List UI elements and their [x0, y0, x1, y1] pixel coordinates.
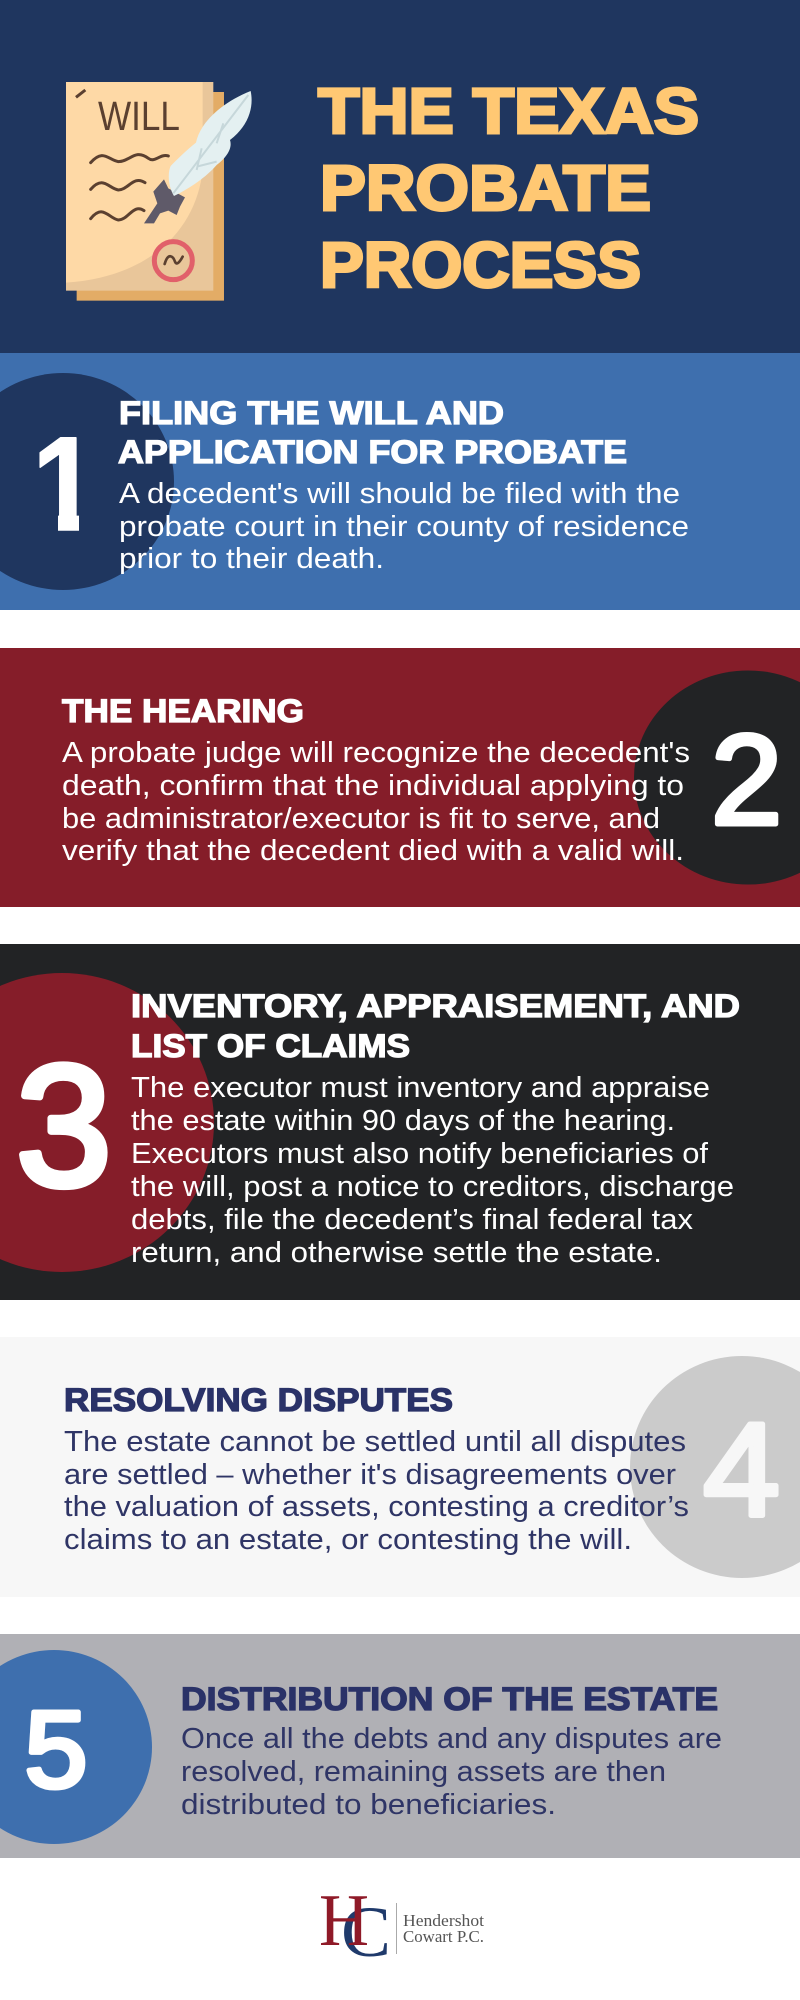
- panel: header: [0, 0, 800, 353]
- text: step 3 body: The executor must inventory and appraise: [131, 1072, 710, 1104]
- title: PROBATE: [320, 152, 651, 224]
- text: step 4 body: claims to an estate, or contesting the will.: [64, 1524, 632, 1556]
- logo: Hendershot Cowart P.C.: Cowart P.C.: [403, 1927, 484, 1946]
- number badge 4: 4: [703, 1396, 780, 1544]
- number badge 1: [0, 373, 174, 590]
- text: step 2 body: verify that the decedent died with a valid will.: [62, 835, 684, 867]
- heading: step 4: RESOLVING DISPUTES: [64, 1382, 453, 1418]
- text: step 5 body: [181, 1723, 722, 1821]
- text: step 1 body: [119, 478, 689, 575]
- text: step 2 body: A probate judge will recognize the decedent's: [62, 737, 690, 769]
- icon: will document with quill: WILL: [98, 93, 180, 139]
- panel: step 2 the hearing: [0, 648, 800, 907]
- text: step 2 body: be administrator/executor is fit to serve, and: [62, 803, 660, 835]
- title: THE TEXAS: [318, 75, 699, 147]
- heading: step 1: FILING THE WILL AND: [119, 395, 504, 431]
- text: step 2 body: [62, 737, 690, 867]
- panel: step 1 filing the will: [0, 353, 800, 610]
- heading: step 1: [118, 395, 627, 470]
- panel: step 3 inventory: [0, 944, 800, 1300]
- title: [318, 75, 699, 301]
- text: step 5 body: Once all the debts and any disputes are: [181, 1723, 722, 1755]
- icon: will document with quill: [66, 82, 252, 301]
- logo: Hendershot Cowart P.C.: Hendershot: [403, 1911, 484, 1930]
- text: step 3 body: Executors must also notify beneficiaries of: [131, 1138, 709, 1170]
- panel: step 4 resolving disputes: [0, 1337, 800, 1597]
- text: step 5 body: distributed to beneficiaries.: [181, 1789, 556, 1821]
- text: step 1 body: probate court in their county of residence: [119, 511, 689, 543]
- number badge 4: [630, 1356, 800, 1578]
- text: step 3 body: the will, post a notice to creditors, discharge: [131, 1171, 734, 1203]
- text: step 5 body: resolved, remaining assets are then: [181, 1756, 666, 1788]
- number badge 5: 5: [24, 1689, 88, 1811]
- text: step 1 body: prior to their death.: [119, 543, 384, 575]
- number badge 1: 1: [32, 410, 98, 559]
- heading: step 3: LIST OF CLAIMS: [131, 1028, 410, 1064]
- text: step 3 body: [131, 1072, 734, 1269]
- number badge 2: [634, 670, 800, 884]
- logo: Hendershot Cowart P.C.: H: [319, 1880, 369, 1962]
- panel: step 5 distribution: [0, 1634, 800, 1858]
- text: step 4 body: The estate cannot be settled until all disputes: [64, 1426, 686, 1458]
- text: step 4 body: [64, 1426, 689, 1556]
- logo: Hendershot Cowart P.C.: [319, 1880, 484, 1972]
- text: step 2 body: death, confirm that the individual applying to: [62, 770, 684, 802]
- text: step 1 body: A decedent's will should be filed with the: [119, 478, 680, 510]
- title: PROCESS: [320, 229, 641, 301]
- text: step 3 body: return, and otherwise settle the estate.: [131, 1237, 662, 1269]
- heading: step 2: THE HEARING: [62, 693, 304, 729]
- number badge 5: [0, 1650, 152, 1844]
- text: step 4 body: are settled – whether it's disagreements over: [64, 1459, 676, 1491]
- text: step 3 body: debts, file the decedent’s final federal tax: [131, 1204, 694, 1236]
- number badge 2: 2: [711, 709, 782, 852]
- heading: step 3: INVENTORY, APPRAISEMENT, AND: [131, 988, 740, 1024]
- number badge 3: [0, 973, 214, 1272]
- text: step 4 body: the valuation of assets, contesting a creditor’s: [64, 1491, 689, 1523]
- heading: step 5: DISTRIBUTION OF THE ESTATE: [181, 1681, 718, 1717]
- number badge 3: 3: [16, 1030, 112, 1222]
- heading: step 3: [131, 988, 740, 1064]
- text: step 3 body: the estate within 90 days of the hearing.: [131, 1105, 675, 1137]
- logo: Hendershot Cowart P.C.: C: [341, 1892, 391, 1972]
- heading: step 1: APPLICATION FOR PROBATE: [118, 434, 627, 470]
